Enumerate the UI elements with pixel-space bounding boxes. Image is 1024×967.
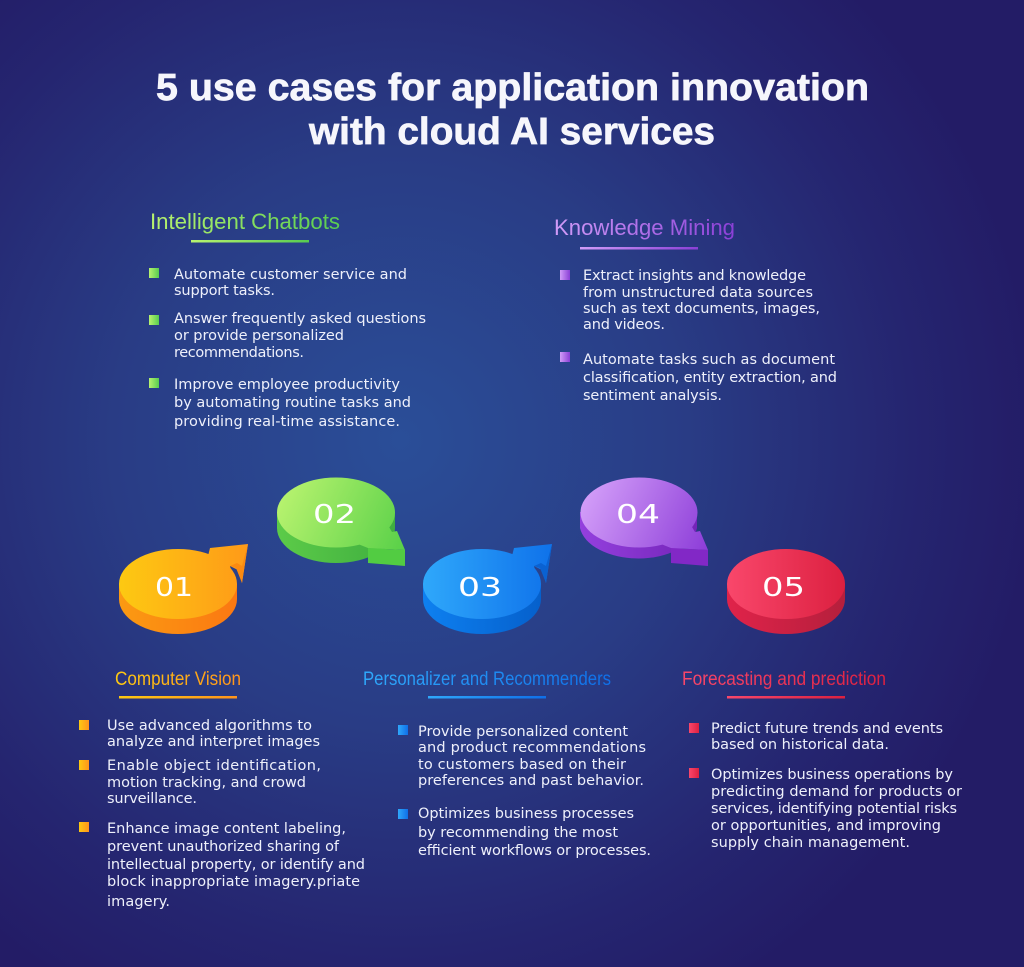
bullet list: forecasting: Optimizes business operations by (711, 767, 953, 783)
bullet list: chatbots: Improve employee productivity (174, 377, 400, 393)
disc 05: 05 (762, 573, 805, 603)
disc 02 with arrow: 02 (313, 500, 356, 530)
title: 5 use cases for application innovation (156, 67, 869, 109)
bullet list: chatbots: or provide personalized (174, 328, 344, 344)
heading: Computer Vision: Computer Vision (115, 669, 241, 690)
bullet list: computer vision: Enhance image content labeling, (107, 821, 346, 837)
disc 04 with arrow (580, 478, 708, 566)
bullet list: forecasting: supply chain management. (711, 835, 910, 851)
bullet list: forecasting: Predict future trends and events (711, 721, 943, 737)
bullet list: forecasting: based on historical data. (711, 737, 889, 753)
bullet list: computer vision: intellectual property, or identify and (107, 857, 365, 873)
title (156, 67, 869, 153)
heading: Intelligent Chatbots: Intelligent Chatbots (150, 209, 340, 234)
bullet list: forecasting (689, 721, 962, 851)
bullet list: computer vision: surveillance. (107, 791, 197, 807)
bullet list: chatbots: recommendations. (174, 345, 304, 361)
bullet list: computer vision: block inappropriate imagery.priate (107, 874, 360, 890)
bullet list: knowledge mining: such as text documents, images, (583, 301, 820, 317)
disc 04 with arrow: 04 (616, 500, 660, 530)
bullet list: personalizer: preferences and past behavior. (418, 773, 644, 789)
bullet list: computer vision: prevent unauthorized sharing of (107, 839, 340, 855)
panel: Forecasting and prediction (682, 669, 962, 851)
bullet list: personalizer (398, 724, 651, 859)
panel: Intelligent Chatbots (149, 209, 426, 430)
bullet list: chatbots: Automate customer service and (174, 267, 407, 283)
bullet list: chatbots: Answer frequently asked questions (174, 311, 426, 327)
bullet list: chatbots: support tasks. (174, 283, 275, 299)
bullet list: personalizer: Optimizes business processes (418, 806, 634, 822)
bullet list: knowledge mining: sentiment analysis. (583, 388, 722, 404)
heading: Forecasting and prediction: Forecasting and prediction (682, 669, 886, 690)
bullet list: knowledge mining: classification, entity extraction, and (583, 370, 837, 386)
panel: Knowledge Mining (554, 215, 837, 404)
bullet list: forecasting: or opportunities, and improving (711, 818, 941, 834)
panel: Personalizer and Recommenders (363, 669, 651, 859)
bullet list: forecasting: services, identifying potential risks (711, 801, 957, 817)
bullet list: knowledge mining: Extract insights and knowledge (583, 268, 806, 284)
bullet list: computer vision: analyze and interpret images (107, 734, 320, 750)
bullet list: computer vision: Use advanced algorithms to (107, 718, 312, 734)
bullet list: computer vision: imagery. (107, 894, 170, 910)
panel: Computer Vision (79, 669, 365, 910)
bullet list: chatbots (149, 267, 426, 430)
bullet list: forecasting: predicting demand for products or (711, 784, 962, 800)
bullet list: computer vision: motion tracking, and crowd (107, 775, 306, 791)
bullet list: computer vision (79, 718, 365, 910)
disc 01 with arrow (119, 544, 248, 634)
bullet list: knowledge mining: from unstructured data sources (583, 285, 813, 301)
title: with cloud AI services (308, 111, 715, 153)
heading: Personalizer and Recommenders: Personalizer and Recommenders (363, 669, 611, 690)
bullet list: chatbots: by automating routine tasks and (174, 395, 411, 411)
bullet list: personalizer: Provide personalized content (418, 724, 628, 740)
bullet list: personalizer: and product recommendations (418, 740, 646, 756)
bullet list: personalizer: by recommending the most (418, 825, 618, 841)
bullet list: chatbots: providing real-time assistance. (174, 414, 400, 430)
disc 03 with arrow (423, 544, 552, 634)
bullet list: knowledge mining (560, 268, 837, 404)
disc 05 (727, 549, 845, 634)
bullet list: computer vision: Enable object identification, (107, 758, 321, 774)
disc 01 with arrow: 01 (155, 573, 193, 603)
bullet list: personalizer: to customers based on their (418, 757, 626, 773)
bullet list: knowledge mining: and videos. (583, 317, 665, 333)
bullet list: knowledge mining: Automate tasks such as document (583, 352, 835, 368)
heading: Knowledge Mining: Knowledge Mining (554, 215, 735, 240)
disc 03 with arrow: 03 (458, 573, 502, 603)
disc 02 with arrow (277, 478, 405, 566)
bullet list: personalizer: efficient workflows or processes. (418, 843, 651, 859)
